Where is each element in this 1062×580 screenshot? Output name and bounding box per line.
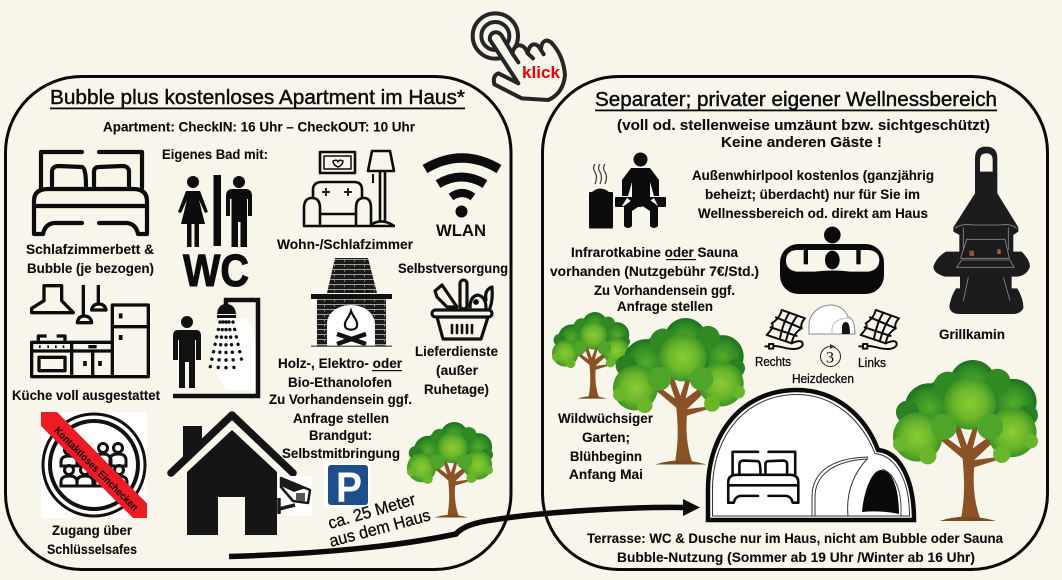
text: sauna info: vorhanden (Nutzgebühr 7€/Std.) <box>550 264 759 279</box>
label: delivery: Lieferdienste <box>415 344 498 359</box>
text: sauna info: Anfrage stellen <box>617 299 713 314</box>
label: oven: Zu Vorhandensein ggf. <box>269 392 412 407</box>
text: check-in times: Apartment: CheckIN: 16 Uhr – CheckOUT: 10 Uhr <box>103 120 416 134</box>
labels: heating blankets <box>755 355 886 386</box>
icon: armchair and lamp <box>303 151 395 226</box>
label: oven: Selbstmitbringung <box>282 446 400 461</box>
text: whirlpool: Wellnessbereich od. direkt am Haus <box>698 206 928 221</box>
text: wellness subtitle <box>617 118 990 151</box>
icon: shower <box>173 300 258 396</box>
icon: sauna <box>589 152 666 228</box>
icon: grill fireplace <box>933 147 1030 314</box>
icon: kitchen <box>32 285 148 377</box>
icon: tree small in garden <box>552 312 630 399</box>
text: own bath: Eigenes Bad mit: <box>162 147 268 162</box>
label: WC: WC <box>183 245 249 296</box>
icon: heated blanket right <box>765 310 805 349</box>
label: delivery: Ruhetage) <box>424 382 489 397</box>
icon: tree near house <box>407 422 493 517</box>
label: living room: Wohn-/Schlafzimmer <box>277 237 414 252</box>
label: distance: ca. 25 Meter <box>326 490 418 533</box>
icon: toilet figures <box>178 175 252 247</box>
label: key safes <box>47 523 137 557</box>
text: sauna info <box>550 245 759 314</box>
icon: parking sign: P <box>336 464 362 512</box>
icon: wifi <box>425 158 499 218</box>
text: garden <box>558 411 654 482</box>
icon: number three <box>820 344 840 366</box>
label: bed: Schlafzimmerbett & <box>26 242 154 257</box>
label: oven: Anfrage stellen <box>293 411 389 426</box>
label: grill: Grillkamin <box>939 327 1005 342</box>
labels: heating blankets: Heizdecken <box>792 372 854 386</box>
label: oven: Brandgut: <box>309 428 372 443</box>
label: distance: aus dem Haus <box>327 506 432 551</box>
panel: apartment <box>6 76 511 570</box>
text: garden: Blühbeginn <box>570 449 642 464</box>
icon: tree large in garden <box>613 318 745 465</box>
text: garden: Wildwüchsiger <box>558 411 654 426</box>
arrow: from house to bubble <box>229 499 700 556</box>
text: sauna info: Infrarotkabine oder Sauna <box>571 245 738 260</box>
icon: number three: 3 <box>826 350 834 366</box>
icon: parking sign <box>324 463 370 512</box>
text: wellness subtitle: (voll od. stellenweise umzäunt bzw. sichtgeschützt) <box>617 118 990 134</box>
label: delivery: (außer <box>436 363 479 378</box>
panel: wellness <box>542 76 1048 570</box>
text: whirlpool: Außenwhirlpool kostenlos (ganzjährig <box>692 168 934 183</box>
label: key safes: Zugang über <box>52 523 133 538</box>
icon: food basket <box>432 280 492 339</box>
text: terrace note: Terrasse: WC & Dusche nur im Haus, nicht am Bubble oder Sauna <box>587 531 1003 546</box>
label: key safes: Schlüsselsafes <box>47 542 137 557</box>
labels: heating blankets: Rechts <box>755 355 791 369</box>
icon: bubble igloo <box>708 390 914 520</box>
text: whirlpool: beheizt; überdacht) nur für Sie im <box>705 187 920 202</box>
label: bed: Bubble (je bezogen) <box>27 261 154 276</box>
label: kitchen: Küche voll ausgestattet <box>12 388 160 403</box>
text: garden: Garten; <box>582 430 630 445</box>
icon: bed <box>34 152 147 234</box>
label: self-catering: Selbstversorgung <box>398 261 508 276</box>
label: oven: Holz-, Elektro- oder <box>278 356 403 371</box>
icon: tree right <box>893 360 1038 521</box>
icon: no contact check-in: Kontaktloses Einchecken <box>51 425 140 514</box>
label: bed <box>26 242 154 276</box>
icon: security camera <box>278 476 312 516</box>
label: WLAN: WLAN <box>436 221 486 240</box>
text: wellness subtitle: Keine anderen Gäste ! <box>721 135 882 151</box>
icon: fireplace <box>311 258 392 347</box>
label: oven: Bio-Ethanolofen <box>288 375 392 390</box>
text: terrace note: Bubble-Nutzung (Sommer ab 19 Uhr /Winter ab 16 Uhr) <box>617 550 975 565</box>
label: delivery <box>415 344 498 397</box>
label: oven <box>269 356 412 461</box>
icon: whirlpool <box>780 227 884 294</box>
heading: wellness: Separater; privater eigener Wellnessbereich <box>595 88 997 111</box>
heading: apartment: Bubble plus kostenloses Apartment im Haus* <box>50 86 465 109</box>
text: garden: Anfang Mai <box>569 467 643 482</box>
labels: heating blankets: Links <box>858 356 886 370</box>
icon: house <box>171 415 293 535</box>
text: whirlpool <box>692 168 934 221</box>
label: klick: klick <box>522 64 561 82</box>
icon: heated blanket left <box>859 310 899 349</box>
icon: small bubble <box>809 305 855 334</box>
text: terrace note <box>587 531 1003 565</box>
text: sauna info: Zu Vorhandensein ggf. <box>594 283 735 298</box>
icon: click hand <box>473 13 565 100</box>
